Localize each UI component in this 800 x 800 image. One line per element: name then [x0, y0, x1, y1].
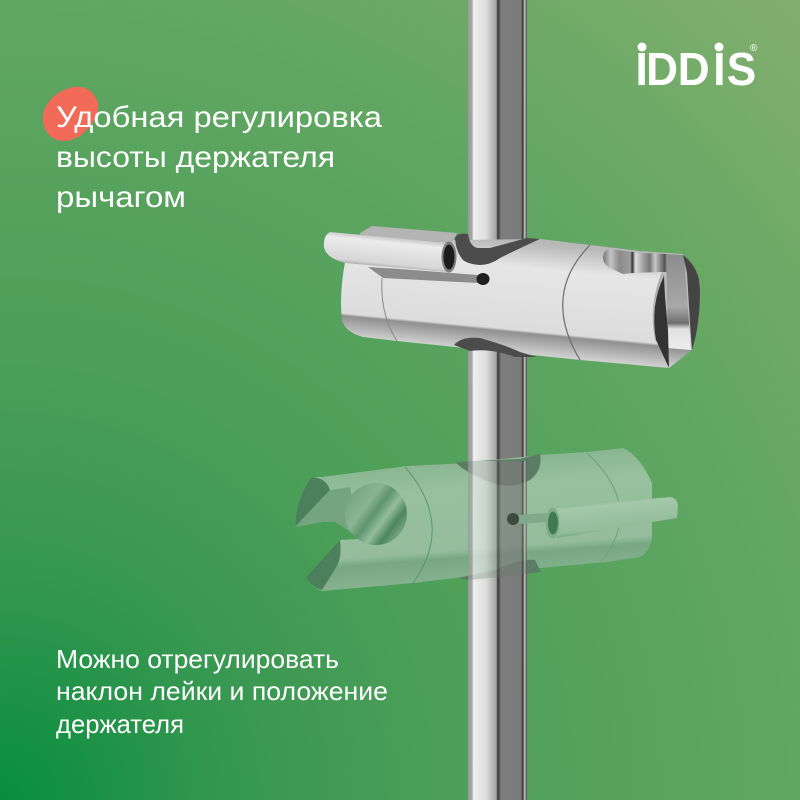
- bottom clip: [458, 560, 541, 580]
- cradle slot streaks: [603, 249, 668, 274]
- logo dot right: [714, 42, 724, 52]
- lever shaft: [368, 267, 478, 283]
- bottom caption: держателя: [56, 709, 184, 739]
- cradle inner strip: [666, 254, 691, 350]
- bottom caption: наклон лейки и положение: [56, 676, 388, 706]
- clamp tube: [552, 497, 678, 538]
- cradle socket: [345, 483, 407, 545]
- cradle background: [603, 249, 700, 368]
- holder collar seam right: [563, 245, 590, 360]
- lower-left dark facet: [306, 540, 341, 590]
- bottom caption: Можно отрегулировать: [56, 644, 339, 674]
- top heading: Удобная регулировка: [56, 101, 382, 134]
- front face highlight: [653, 272, 665, 345]
- accent blob: [43, 87, 98, 141]
- rear tube: [360, 226, 457, 243]
- top heading: [56, 101, 382, 214]
- top heading: высоты держателя: [56, 141, 335, 174]
- bottom caption: [56, 644, 388, 739]
- bottom clip: [454, 338, 537, 357]
- upper chrome holder: [324, 226, 700, 368]
- top clip: [455, 454, 541, 486]
- clamp tube: [324, 232, 450, 272]
- lever shaft: [519, 513, 547, 524]
- collar seam left: [405, 467, 432, 583]
- logo wordmark: IDDIS: [636, 43, 756, 95]
- ghost body: [295, 448, 652, 591]
- tube end: [442, 242, 456, 272]
- collar seam right: [587, 453, 620, 563]
- tube end: [546, 508, 560, 538]
- lower ghost holder: [295, 448, 678, 591]
- lever hole: [507, 513, 519, 525]
- cradle inner left edge: [654, 276, 669, 368]
- registered mark: ®: [750, 43, 758, 54]
- logo: IDDIS: [636, 42, 758, 95]
- cradle ribbon: [295, 487, 360, 540]
- cradle inner right edge: [683, 255, 700, 350]
- rail overlay: [468, 461, 527, 580]
- tube bore: [548, 512, 558, 534]
- top heading: рычагом: [56, 181, 186, 214]
- tube bore: [444, 244, 454, 270]
- top clip: [455, 234, 540, 265]
- lever hole: [476, 273, 490, 285]
- left upper dark facet: [295, 477, 330, 527]
- chrome rail: [468, 0, 527, 800]
- holder collar seam left: [382, 278, 397, 341]
- holder body: [341, 239, 700, 368]
- logo dot left: [638, 42, 646, 52]
